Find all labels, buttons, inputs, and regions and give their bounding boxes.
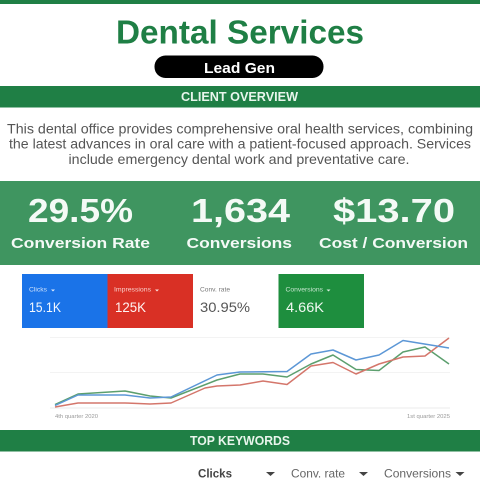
- metric: conversions: Conversions: [186, 235, 292, 252]
- table header: clicks: Clicks: [198, 466, 232, 480]
- section heading: client overview: CLIENT OVERVIEW: [181, 90, 298, 104]
- section heading: top keywords: TOP KEYWORDS: [190, 434, 290, 448]
- metric: cost per conversion: [319, 192, 468, 252]
- axis label: start: 4th quarter 2020: [55, 414, 98, 420]
- card: impressions: Impressions: [114, 288, 151, 294]
- overview text: the latest advances in oral care with a patient-focused approach. Services: [9, 136, 471, 152]
- overview text: [7, 120, 473, 167]
- card: clicks: 15.1K: [29, 299, 62, 315]
- panel: key metrics: [0, 181, 480, 265]
- title: Dental Services: [116, 14, 364, 50]
- card: conv. rate: Conv. rate: [200, 288, 231, 294]
- card: conversions: 4.66K: [286, 299, 325, 315]
- metric: conversion rate: 29.5%: [28, 192, 133, 229]
- series: impressions: [55, 338, 449, 407]
- metric: conversion rate: Conversion Rate: [11, 235, 150, 252]
- section heading: client overview: [0, 86, 480, 108]
- card: conv. rate: 30.95%: [200, 299, 250, 315]
- overview text: This dental office provides comprehensive oral health services, combining: [7, 120, 473, 136]
- card: clicks: [22, 274, 108, 328]
- section heading: top keywords: [0, 430, 480, 452]
- metric: conversions: [186, 192, 292, 252]
- table header: clicks: [198, 466, 275, 480]
- table header: conv. rate: Conv. rate: [291, 466, 345, 480]
- axis label: end: 1st quarter 2025: [407, 414, 450, 420]
- metric: cost per conversion: $13.70: [333, 192, 455, 229]
- badge: Lead Gen: [154, 56, 324, 78]
- card: conversions: Conversions: [286, 288, 323, 294]
- card: conversions: [278, 274, 364, 328]
- card: conv. rate: [193, 274, 278, 328]
- card: impressions: [108, 274, 193, 328]
- overview text: include emergency dental work and preventative care.: [68, 151, 410, 167]
- metric: cost per conversion: Cost / Conversion: [319, 235, 468, 252]
- series: clicks: [55, 340, 449, 406]
- card: clicks: Clicks: [29, 288, 47, 294]
- metric: conversions: 1,634: [191, 192, 291, 229]
- card: impressions: 125K: [115, 299, 147, 315]
- table header: conversions: Conversions: [384, 466, 451, 480]
- badge: Lead Gen: Lead Gen: [204, 60, 275, 77]
- line chart: [50, 338, 450, 408]
- top bar: [0, 0, 480, 4]
- series: conversions: [55, 347, 449, 404]
- metric: conversion rate: [11, 192, 150, 252]
